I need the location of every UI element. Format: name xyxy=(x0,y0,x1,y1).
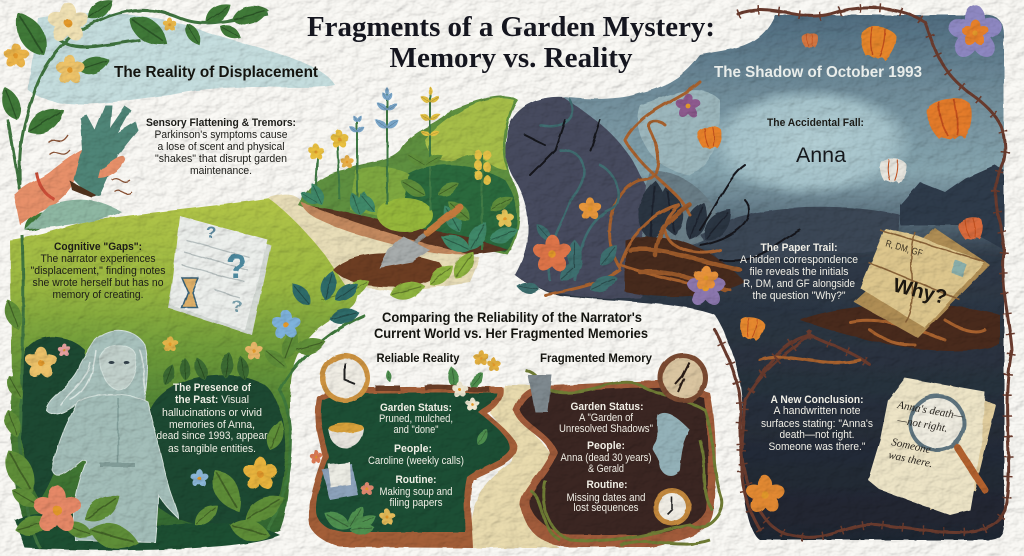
text: the accidental fall xyxy=(767,117,864,167)
text: cognitive gaps: Cognitive "Gaps": xyxy=(54,241,142,253)
text: the accidental fall: The Accidental Fall: xyxy=(767,117,864,129)
text: reliable reality details: and "done" xyxy=(394,424,439,436)
text: cognitive gaps: The narrator experiences xyxy=(40,253,156,265)
text: the paper trail: the question "Why?" xyxy=(752,290,846,302)
text: the accidental fall: Anna xyxy=(796,144,846,167)
text: fragmented memory details xyxy=(559,401,653,514)
panel: shadow of october 1993 xyxy=(506,15,1004,540)
text: presence of the past: dead since 1993, appear xyxy=(156,430,268,442)
text: presence of the past: as tangible entities. xyxy=(168,443,256,455)
text: cognitive gaps xyxy=(30,241,166,301)
text: cognitive gaps: memory of creating. xyxy=(52,289,144,301)
text: presence of the past: hallucinations or vivid xyxy=(162,407,262,419)
icon: hand holding glove xyxy=(14,105,138,230)
roots and thorny branches xyxy=(525,8,1012,537)
text: the paper trail: file reveals the initials xyxy=(750,266,849,278)
text: the paper trail: R, DM, and GF alongside xyxy=(743,278,855,290)
text: sensory flattening xyxy=(146,117,296,177)
panel: reliable reality xyxy=(309,350,517,548)
text: the paper trail: A hidden correspondence xyxy=(740,254,858,266)
icon: soup bowl xyxy=(328,428,364,448)
heading: reality of displacement: The Reality of Displacement xyxy=(114,64,319,81)
text: reliable reality details: filing papers xyxy=(390,497,443,509)
thorns xyxy=(715,8,1012,537)
dark foliage right of ghost xyxy=(150,375,285,526)
text: sensory flattening: Parkinson's symptoms cause xyxy=(154,129,288,141)
heading: comparing reliability: Current World vs. Her Fragmented Memories xyxy=(374,325,648,341)
text: fragmented memory details: People: xyxy=(587,440,625,452)
text: sensory flattening: "shakes" that disrupt garden xyxy=(155,153,287,165)
sand path between boxes xyxy=(471,385,560,548)
panel: fragmented memory xyxy=(513,353,722,547)
text: handwritten note: was there. xyxy=(887,449,934,470)
flowers of the shadow panel xyxy=(515,5,1005,515)
text: reliable reality details: Caroline (weekly calls) xyxy=(368,455,464,467)
text: reliable reality details xyxy=(368,402,464,509)
icon: pocket clock xyxy=(653,488,691,526)
bush silhouettes xyxy=(636,179,738,246)
text: a new conclusion: A New Conclusion: xyxy=(770,394,864,406)
text: fragmented memory details: Missing dates and xyxy=(566,492,646,504)
text: sensory flattening: a lose of scent and physical xyxy=(158,141,284,153)
icon: file folder xyxy=(322,464,358,500)
icon: notes with question marks: ? xyxy=(232,297,242,316)
text: reliable reality details: Making soup and xyxy=(380,486,452,498)
panel: garden vignette xyxy=(298,86,521,307)
sand path xyxy=(268,194,480,292)
text: fragmented memory details: Unresolved Shadows" xyxy=(559,423,653,435)
icon: trowel xyxy=(379,207,460,268)
grass blades xyxy=(160,351,251,387)
title: Fragments of a Garden Mystery: xyxy=(307,11,715,43)
text: letter bundle labels: Why? xyxy=(891,275,949,309)
text: handwritten note xyxy=(887,399,965,470)
text: fragmented memory details: lost sequences xyxy=(574,502,639,514)
icon: clock reality xyxy=(320,353,370,403)
heading: comparing reliability: Comparing the Reliability of the Narrator's xyxy=(382,309,642,325)
icon: letter bundle xyxy=(854,228,990,338)
text: fragmented memory details: Anna (dead 30 years) xyxy=(560,452,652,464)
ghost of Anna xyxy=(46,330,178,542)
soil mound xyxy=(333,253,443,287)
icon: notes with question marks: ? xyxy=(206,223,216,242)
text: cognitive gaps: "displacement," finding notes xyxy=(30,265,166,277)
text: fragmented memory details: & Gerald xyxy=(588,463,624,475)
dark roots ground xyxy=(800,304,1000,351)
soil bed xyxy=(308,206,508,255)
broken statue xyxy=(528,375,552,412)
text: a new conclusion: Someone was there." xyxy=(768,441,866,453)
text: letter bundle labels xyxy=(884,238,949,309)
icon: notes with question marks: ? xyxy=(226,248,247,286)
text: reliable reality details: Routine: xyxy=(396,474,436,486)
icon: notes with question marks xyxy=(168,216,271,335)
title xyxy=(307,11,715,74)
ghost figure small xyxy=(653,413,690,476)
title: Memory vs. Reality xyxy=(390,42,633,74)
label: fragmented memory: Fragmented Memory xyxy=(540,351,652,365)
left vine xyxy=(0,0,271,548)
text: a new conclusion: A handwritten note xyxy=(774,405,860,417)
text: fragmented memory details: Garden Status: xyxy=(570,401,644,413)
text: presence of the past xyxy=(156,382,268,455)
text: the paper trail: The Paper Trail: xyxy=(760,242,838,254)
text: sensory flattening: maintenance. xyxy=(190,165,252,177)
text: handwritten note: Someone xyxy=(890,436,932,456)
text: presence of the past: the Past: Visual xyxy=(175,394,249,406)
text: a new conclusion xyxy=(761,394,873,453)
text: presence of the past: memories of Anna, xyxy=(169,419,255,431)
text: fragmented memory details: Routine: xyxy=(586,479,628,491)
text: fragmented memory details: A "Garden of xyxy=(579,412,634,424)
text: presence of the past: The Presence of xyxy=(173,382,251,394)
heading: shadow of october 1993: The Shadow of October 1993 xyxy=(714,64,922,81)
grass blades under mound xyxy=(318,247,480,307)
icon: cracked clock xyxy=(658,353,708,403)
plants xyxy=(315,88,482,250)
text: handwritten note: Anna's death— xyxy=(895,399,965,423)
text: a new conclusion: death—not right. xyxy=(780,429,854,441)
text: handwritten note: —not right. xyxy=(895,414,949,435)
small plants xyxy=(320,365,491,536)
panel: reality of displacement wash xyxy=(28,13,335,104)
icon: note with magnifying glass xyxy=(868,378,996,515)
label: reliable reality: Reliable Reality xyxy=(376,351,460,365)
heading: comparing reliability xyxy=(374,309,648,341)
text: cognitive gaps: she wrote herself but has no xyxy=(32,277,164,289)
text: a new conclusion: surfaces stating: "Anna's xyxy=(761,418,873,430)
panel: grass field xyxy=(10,194,480,550)
text: sensory flattening: Sensory Flattening & Tremors: xyxy=(146,117,296,129)
dark foliage left of ghost xyxy=(20,337,85,500)
text: reliable reality details: Pruned, mulched, xyxy=(379,413,453,425)
text: reliable reality details: People: xyxy=(394,443,432,455)
foliage and flowers around ghost xyxy=(0,269,365,555)
text: letter bundle labels: R, DM, GF xyxy=(884,238,924,259)
text: reliable reality details: Garden Status: xyxy=(380,402,452,414)
text: the paper trail xyxy=(740,242,858,302)
icon: hourglass xyxy=(182,278,198,308)
